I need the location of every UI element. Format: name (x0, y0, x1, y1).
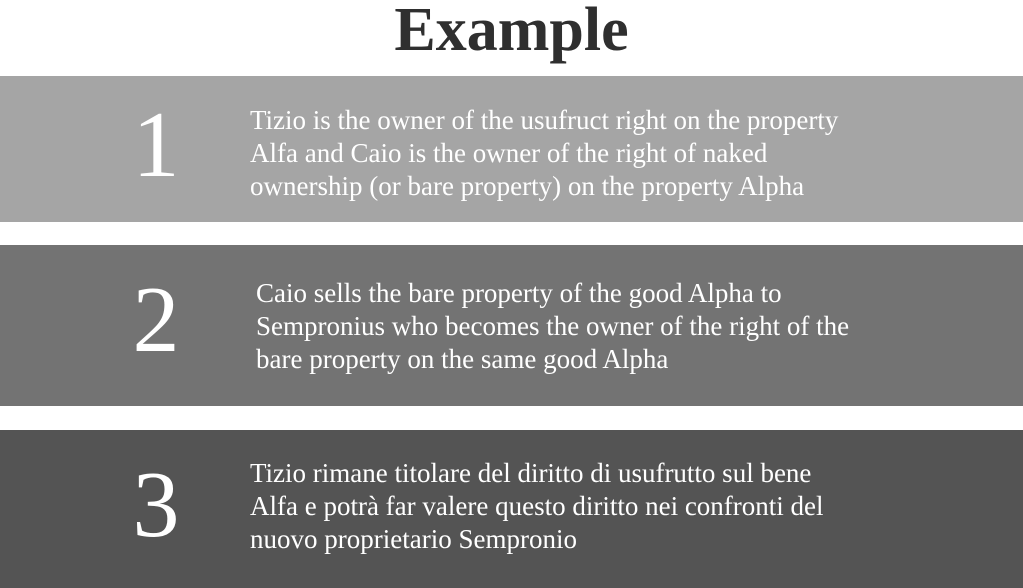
text 2: bare property on the same good Alpha (256, 344, 668, 374)
text 3: nuovo proprietario Sempronio (250, 524, 577, 554)
panel: step 3 (0, 430, 1023, 588)
text 3: Alfa e potrà far valere questo diritto nei confronti del (250, 491, 824, 521)
panel: step 1 (0, 76, 1023, 222)
number 3: 3 (132, 453, 180, 557)
text 1: ownership (or bare property) on the property Alpha (250, 171, 804, 201)
text 2: Sempronius who becomes the owner of the right of the (256, 311, 849, 341)
text 1 (250, 105, 838, 201)
text 2: Caio sells the bare property of the good Alpha to (256, 278, 782, 308)
text 1: Tizio is the owner of the usufruct right on the property (250, 105, 838, 135)
number 1: 1 (132, 93, 180, 197)
text 1: Alfa and Caio is the owner of the right of naked (250, 138, 767, 168)
text 2 (256, 278, 849, 374)
text 3 (250, 458, 824, 554)
number 2: 2 (132, 268, 180, 372)
text 3: Tizio rimane titolare del diritto di usufrutto sul bene (250, 458, 811, 488)
panel: step 2 (0, 245, 1023, 406)
